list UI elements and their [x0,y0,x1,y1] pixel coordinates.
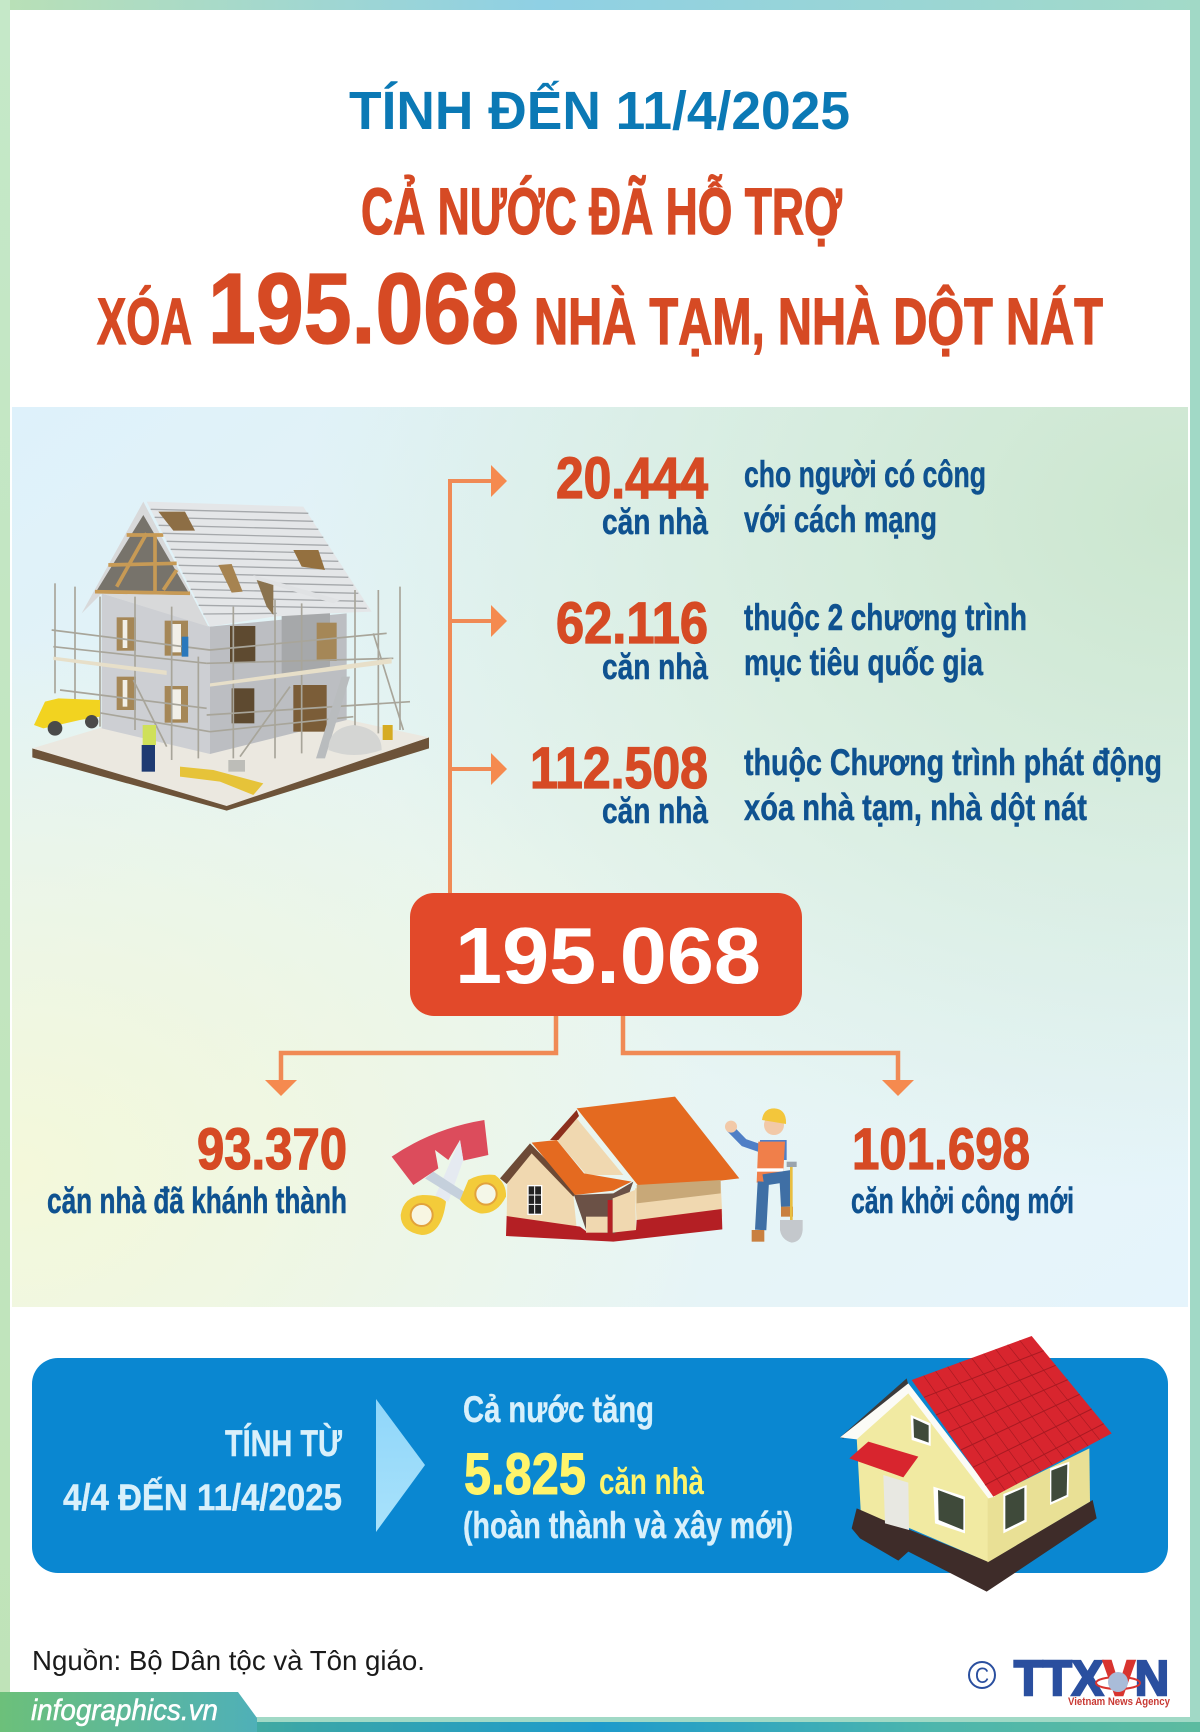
increase text: (hoàn thành và xây mới) [463,1505,793,1546]
stat: 62.116 [556,591,1027,687]
headline line 2: 195.068 [208,253,519,365]
icon: house under construction [32,502,429,811]
stat: 112.508: 112.508 [530,736,708,801]
headline line 1: CẢ NƯỚC ĐÃ HỖ TRỢ [361,174,842,248]
increase text: căn nhà [599,1461,704,1502]
icon: scissors cutting ribbon, house and worker [392,1097,803,1243]
stat: 112.508: căn nhà [602,790,709,831]
stat: 20.444: với cách mạng [744,499,937,540]
stat: 62.116: 62.116 [556,591,708,656]
arrow: chevron [376,1399,425,1532]
stat: 101.698 started [851,1117,1074,1221]
stat: 62.116: thuộc 2 chương trình [744,597,1027,638]
period label: TÍNH TỪ [225,1422,342,1464]
stat: 20.444 [556,446,986,542]
footer band [0,1692,1200,1732]
stat: 20.444: cho người có công [744,454,986,495]
stat: 112.508: xóa nhà tạm, nhà dột nát [744,787,1087,828]
stat: 62.116: căn nhà [602,646,709,687]
logo: TTXVN: Vietnam News Agency [1068,1696,1171,1708]
stat: 101.698 started: 101.698 [852,1117,1030,1182]
total box: 195.068 [410,893,802,1016]
icon: ribbon and scissors [392,1120,506,1235]
stat: 20.444: căn nhà [602,501,709,542]
date heading: TÍNH ĐẾN 11/4/2025 [349,81,850,141]
stat: 93.370 completed: căn nhà đã khánh thành [47,1180,347,1221]
stat: 93.370 completed [47,1117,347,1221]
footer website label: infographics.vn [31,1694,218,1727]
increase text: 5.825 [464,1442,586,1507]
connector: main arrows up to categories [450,465,507,893]
period label: 4/4 ĐẾN 11/4/2025 [63,1477,342,1518]
connector: arrows down to outcomes [265,1016,914,1096]
total box: 195.068: 195.068 [455,911,761,1000]
headline line 2 [97,253,1103,365]
logo: TTXVN: C [975,1663,989,1688]
increase text [463,1389,793,1546]
stat: 20.444: 20.444 [556,446,708,511]
stat: 101.698 started: căn khởi công mới [851,1180,1074,1221]
stat: 62.116: mục tiêu quốc gia [744,642,983,683]
panel: breakdown background [12,407,1188,1307]
panel: weekly increase bar [32,1358,1168,1573]
stat: 112.508 [530,736,1162,831]
icon: worker with shovel [725,1108,803,1243]
headline line 2: XÓA [97,284,192,358]
icon: orange house [500,1097,739,1242]
source note: Nguồn: Bộ Dân tộc và Tôn giáo. [32,1645,425,1676]
title [97,81,1103,365]
increase text: Cả nước tăng [463,1389,654,1430]
icon: red roof house [840,1336,1112,1592]
period label [63,1422,342,1518]
stat: 93.370 completed: 93.370 [197,1117,347,1182]
logo: TTXVN: TTXVN [1014,1652,1169,1706]
